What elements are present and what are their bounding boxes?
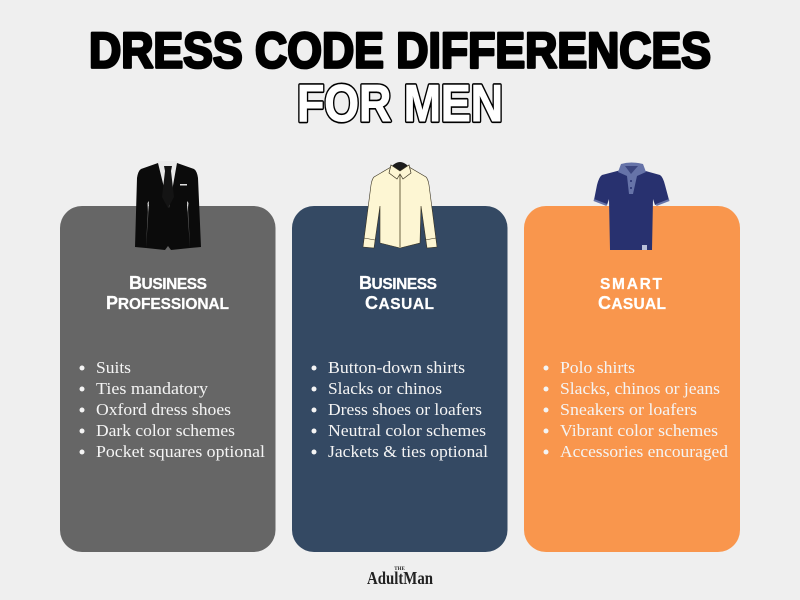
list: business casual: Slacks or chinos [328, 379, 442, 398]
heading: smart casual: CASUAL [598, 293, 666, 313]
icon: cream shirt [363, 162, 437, 248]
list: smart casual: Accessories encouraged [560, 442, 729, 461]
heading: business professional: BUSINESS [129, 273, 207, 293]
card background [292, 206, 508, 552]
heading: smart casual [598, 276, 666, 313]
list: business professional: Suits [96, 358, 131, 377]
list: business casual: Jackets & ties optional [328, 442, 488, 461]
list: smart casual: Slacks, chinos or jeans [560, 379, 720, 398]
heading: business professional [106, 273, 229, 313]
icon: black suit [135, 161, 201, 250]
title: FOR MEN [297, 75, 503, 133]
panel: smart casual [524, 162, 740, 552]
list: business professional: Dark color schemes [96, 421, 235, 440]
panel: business casual [292, 162, 508, 552]
heading: business professional: PROFESSIONAL [106, 293, 229, 313]
title: DRESS CODE DIFFERENCES [89, 22, 711, 78]
list: business casual [312, 358, 488, 461]
heading: business casual: CASUAL [365, 293, 434, 313]
logo: The Adult Man: THE [394, 567, 405, 572]
list: business casual: Dress shoes or loafers [328, 400, 482, 419]
title: FOR MEN [297, 75, 503, 133]
list: business casual: Neutral color schemes [328, 421, 486, 440]
logo: The Adult Man: AdultMan [367, 568, 433, 588]
list: business casual: Button-down shirts [328, 358, 465, 377]
heading: business casual [359, 273, 437, 313]
icon: navy polo shirt [594, 162, 670, 250]
list: business professional [80, 358, 265, 461]
list: smart casual [544, 358, 729, 461]
list: smart casual: Vibrant color schemes [560, 421, 718, 440]
list: business professional: Pocket squares optional [96, 442, 265, 461]
list: business professional: Ties mandatory [96, 379, 209, 398]
panel: business professional [60, 161, 276, 552]
list: smart casual: Sneakers or loafers [560, 400, 697, 419]
list: smart casual: Polo shirts [560, 358, 635, 377]
list: business professional: Oxford dress shoes [96, 400, 231, 419]
title [89, 22, 711, 133]
heading: smart casual: SMART [600, 276, 663, 293]
card background [60, 206, 276, 552]
heading: business casual: BUSINESS [359, 273, 437, 293]
card background [524, 206, 740, 552]
